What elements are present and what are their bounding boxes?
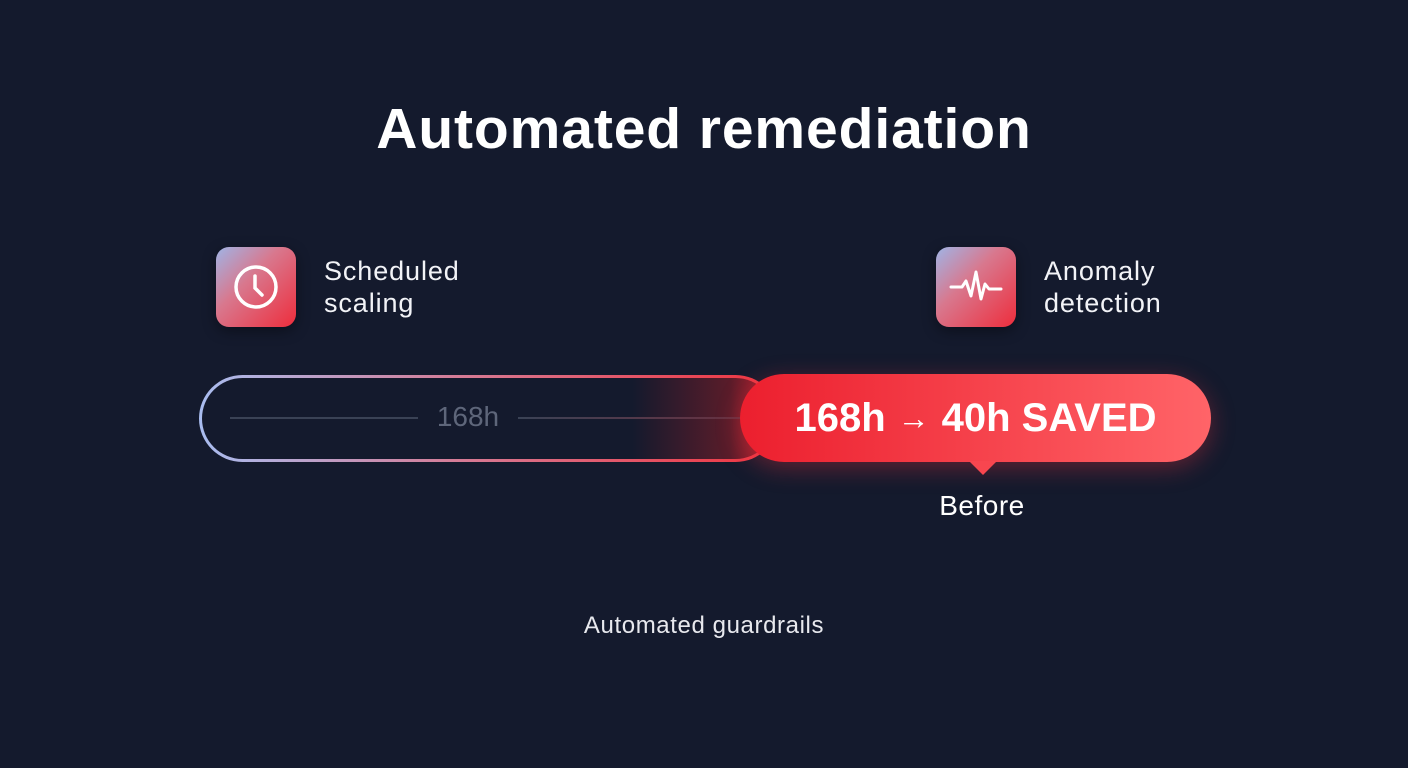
label: detection (1044, 288, 1162, 318)
callout: savings pill: 168h 40h SAVED (794, 396, 1157, 440)
icon: heartbeat (936, 247, 1016, 327)
label: Anomaly (1044, 256, 1155, 286)
item: scheduled scaling (215, 247, 460, 332)
footer text: Automated guardrails (584, 612, 824, 639)
label: scaling (324, 288, 414, 318)
title: Automated remediation (376, 97, 1032, 161)
pointer (969, 461, 997, 475)
label: 168h: 168h (437, 401, 499, 432)
label: Scheduled (324, 256, 460, 286)
bar: before track (199, 375, 779, 462)
label: before: Before (939, 490, 1025, 521)
item: anomaly detection (935, 247, 1162, 332)
label (1044, 256, 1162, 318)
label (324, 256, 460, 318)
callout: savings pill: → (898, 400, 930, 436)
callout: savings pill (740, 374, 1211, 462)
icon: clock (216, 247, 296, 327)
